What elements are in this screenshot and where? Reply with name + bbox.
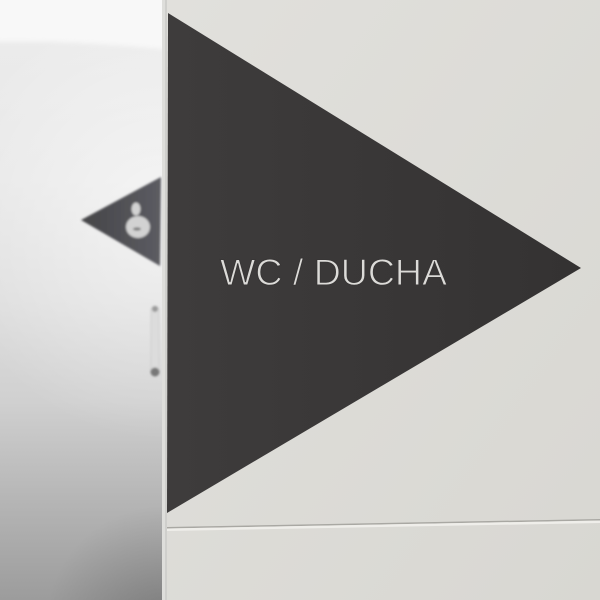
blurred accessibility sign — [81, 177, 161, 266]
icon: wheelchair symbol — [126, 202, 150, 238]
panel seam — [167, 519, 600, 531]
door frame edge — [162, 0, 168, 600]
blurred door handle — [150, 306, 160, 376]
blurred background wall — [0, 0, 190, 600]
foreground panel — [167, 0, 600, 600]
sign text: WC / DUCHA — [220, 252, 447, 293]
dark triangular sign — [167, 13, 581, 513]
